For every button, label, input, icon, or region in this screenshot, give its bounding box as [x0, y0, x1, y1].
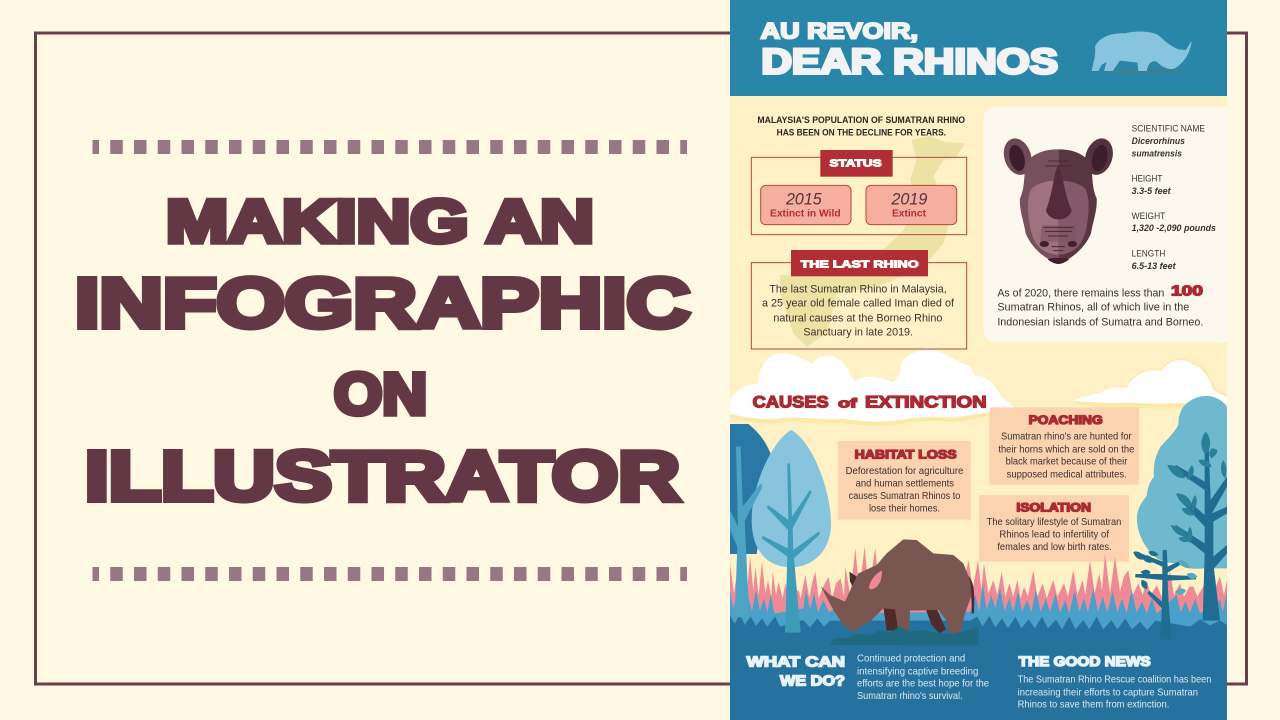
good news text: increasing their efforts to capture Sumatran [1018, 687, 1198, 698]
causes heading: EXTINCTION [865, 393, 987, 412]
main title: ILLUSTRATOR [85, 437, 680, 515]
panel: isolation: ISOLATION [1016, 500, 1091, 514]
panel: habitat loss: causes Sumatran Rhinos to [849, 491, 961, 502]
what can we do text: intensifying captive breeding [857, 666, 978, 677]
status 2015: Extinct in Wild [770, 208, 841, 219]
icon: header rhino silhouette [1092, 32, 1192, 73]
panel: the last rhino: Sanctuary in late 2019. [803, 327, 913, 339]
causes heading [753, 393, 987, 412]
species facts: Dicerorhinus [1132, 136, 1185, 146]
what can we do text: Sumatran rhino's survival. [857, 691, 963, 702]
poster title [761, 18, 1058, 81]
map of Malaysia backdrop [780, 136, 965, 347]
upper poster section [730, 0, 1227, 349]
what can we do text [857, 654, 989, 702]
what can we do text: Continued protection and [857, 654, 965, 665]
population note: Sumatran Rhinos, all of which live in the [997, 302, 1189, 314]
species facts: 1,320 -2,090 pounds [1132, 223, 1216, 233]
good news heading: THE GOOD NEWS [1019, 653, 1151, 669]
panel: habitat loss [838, 441, 971, 520]
what can we do heading: WE DO? [780, 674, 845, 690]
left tree trunk [730, 447, 763, 618]
pink grass [730, 547, 1227, 650]
panel: poaching: black market because of their [1006, 457, 1128, 468]
panel: poaching: their horns which are sold on the [998, 444, 1135, 455]
panel: the last rhino: a 25 year old female called Iman died of [762, 298, 955, 310]
species facts: HEIGHT [1132, 173, 1163, 183]
status 2015: 2015 [785, 189, 822, 208]
population note: Indonesian islands of Sumatra and Borneo. [997, 316, 1203, 328]
light tree trunk [762, 463, 820, 633]
panel: poaching: POACHING [1029, 413, 1103, 427]
icon: rhino head [999, 135, 1117, 264]
population note: As of 2020, there remains less than [997, 287, 1164, 299]
panel: the last rhino: THE LAST RHINO [801, 259, 919, 270]
light tree canopy [752, 430, 831, 567]
species facts: WEIGHT [1132, 211, 1166, 221]
good news text: Rhinos to save them from extinction. [1018, 700, 1169, 711]
main title: MAKING AN [166, 188, 594, 255]
species facts [1132, 123, 1216, 271]
causes heading: CAUSES [753, 393, 829, 412]
lower poster section [730, 350, 1227, 720]
status 2019: 2019 [890, 189, 927, 208]
panel: poaching: supposed medical attributes. [1007, 469, 1127, 480]
what can we do heading [747, 655, 845, 690]
intro text: HAS BEEN ON THE DECLINE FOR YEARS. [777, 128, 946, 138]
main title [75, 188, 690, 515]
main title: ON [334, 362, 427, 427]
poster title: AU REVOIR, [761, 18, 918, 43]
panel: isolation: The solitary lifestyle of Sumatran [987, 517, 1121, 528]
panel: the last rhino [751, 250, 967, 349]
cloud: right [1073, 359, 1227, 409]
panel: habitat loss: HABITAT LOSS [855, 447, 957, 461]
causes heading: of [838, 396, 857, 411]
panel: habitat loss: and human settlements [856, 479, 954, 490]
header band [730, 0, 1227, 96]
population note [997, 284, 1203, 328]
species facts: 6.5-13 feet [1132, 261, 1177, 271]
panel: rhino facts [983, 107, 1227, 342]
panel: habitat loss: lose their homes. [869, 503, 940, 514]
cloud: causes [730, 350, 1022, 426]
panel: the last rhino: The last Sumatran Rhino in Malaysia, [769, 283, 947, 295]
panel: the last rhino: natural causes at the Borneo Rhino [773, 312, 942, 324]
panel: poaching [989, 407, 1139, 485]
intro text: MALAYSIA'S POPULATION OF SUMATRAN RHINO [757, 115, 965, 125]
population note: 100 [1171, 284, 1203, 300]
status 2019: Extinct [892, 208, 927, 219]
good news text: The Sumatran Rhino Rescue coalition has been [1018, 675, 1211, 686]
infographic poster [730, 0, 1227, 720]
panel: isolation [979, 495, 1129, 562]
small tree [1133, 550, 1197, 639]
panel: status: STATUS [829, 159, 882, 170]
big rhino [821, 539, 978, 646]
species facts: SCIENTIFIC NAME [1132, 123, 1205, 133]
ground and lower band [730, 613, 1227, 720]
panel: isolation: females and low birth rates. [997, 542, 1112, 553]
species facts: sumatrensis [1132, 148, 1182, 158]
poster title: DEAR RHINOS [761, 42, 1058, 81]
panel: habitat loss: Deforestation for agriculture [846, 466, 964, 477]
what can we do heading: WHAT CAN [747, 655, 845, 671]
what can we do text: efforts are the best hope for the [857, 679, 989, 690]
right tree trunk and leaves [1167, 432, 1227, 621]
right tree canopy [1137, 396, 1227, 569]
panel: isolation: Rhinos lead to infertility of [999, 530, 1109, 541]
status 2015 [761, 185, 851, 225]
top dashed divider [92, 140, 687, 154]
dark tree left [730, 424, 771, 554]
main title: INFOGRAPHIC [75, 264, 690, 342]
panel: status [751, 150, 967, 235]
species facts: LENGTH [1132, 248, 1165, 258]
good news text [1018, 675, 1211, 711]
panel: poaching: Sumatran rhino's are hunted for [1001, 432, 1132, 443]
intro text [757, 115, 965, 138]
status 2019 [866, 185, 957, 225]
species facts: 3.3-5 feet [1132, 186, 1172, 196]
blue grass [730, 583, 1227, 650]
bottom dashed divider [92, 567, 687, 581]
